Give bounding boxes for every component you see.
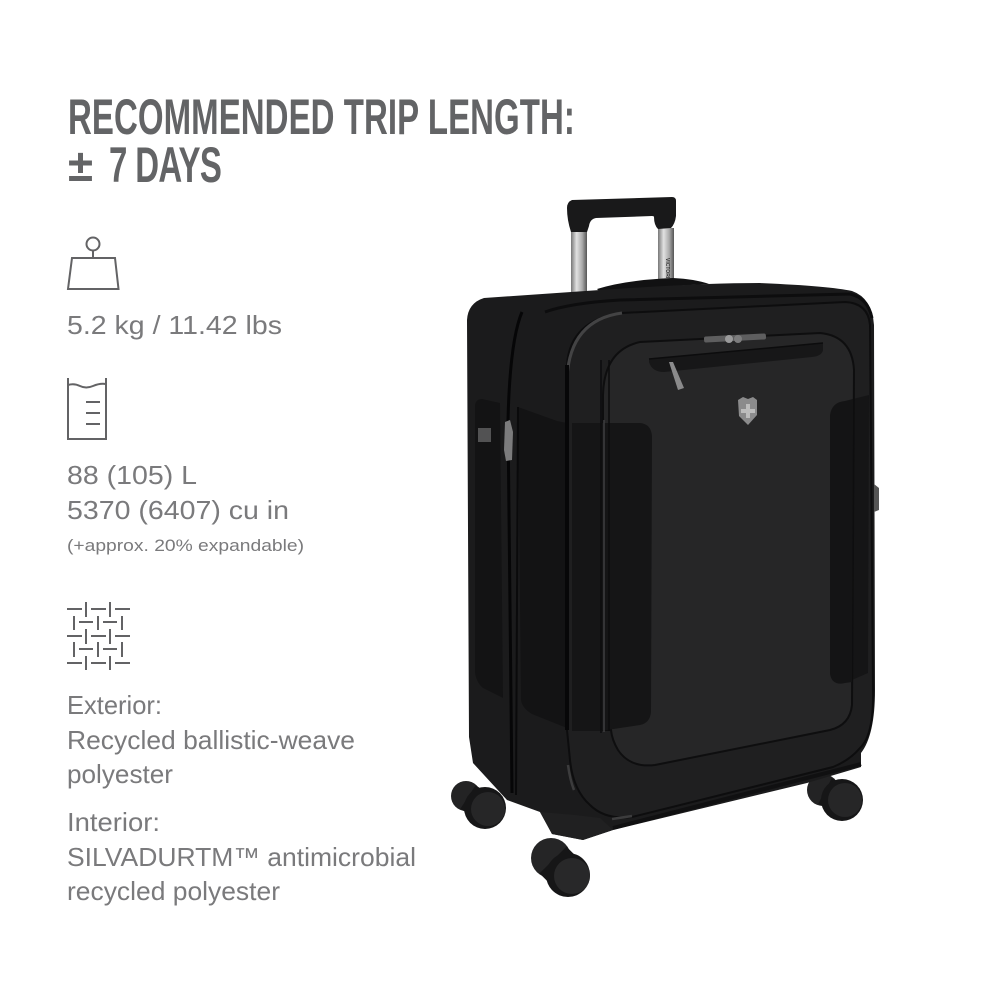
body <box>467 283 875 840</box>
right zipper pull <box>874 484 879 512</box>
front mesh pocket <box>572 423 652 731</box>
material text: Interior: <box>67 807 160 837</box>
icon: weight <box>68 238 118 289</box>
panel trim highlight <box>567 313 622 378</box>
title: RECOMMENDED TRIP LENGTH: <box>68 89 575 145</box>
material text: Exterior: <box>67 690 162 720</box>
material text: recycled polyester <box>67 876 280 906</box>
icon: volume container <box>68 378 106 439</box>
inner front panel <box>603 333 854 765</box>
front wheel <box>531 838 590 897</box>
front pocket zipper <box>649 333 823 390</box>
volume text: 5370 (6407) cu in <box>67 495 289 525</box>
top dark band <box>545 294 872 318</box>
icon: woven material <box>67 602 130 670</box>
bottom base <box>540 812 613 840</box>
telescopic handle <box>567 197 676 292</box>
wheels <box>451 774 863 897</box>
rear right wheel <box>807 774 863 821</box>
shield logo <box>738 397 757 425</box>
title: ± <box>68 140 93 191</box>
material text: Recycled ballistic-weave <box>67 725 355 755</box>
material text: SILVADURTM™ antimicrobial <box>67 842 416 872</box>
rear left wheel <box>451 781 506 829</box>
side zipper pull and tab <box>478 420 513 461</box>
title: 7 DAYS <box>109 137 222 193</box>
zipper line <box>603 420 605 732</box>
weight text: 5.2 kg / 11.42 lbs <box>67 310 282 340</box>
title <box>68 89 575 193</box>
front panel <box>567 302 873 818</box>
telescopic handle: VICTORINOX <box>664 258 670 290</box>
volume text: 88 (105) L <box>67 460 197 490</box>
side seams <box>508 312 522 793</box>
volume text <box>67 460 304 555</box>
volume text: (+approx. 20% expandable) <box>67 536 304 555</box>
material text: polyester <box>67 759 173 789</box>
side mesh pockets <box>475 395 869 728</box>
carry handle <box>597 278 709 292</box>
material text <box>67 690 416 906</box>
suitcase <box>451 197 879 897</box>
